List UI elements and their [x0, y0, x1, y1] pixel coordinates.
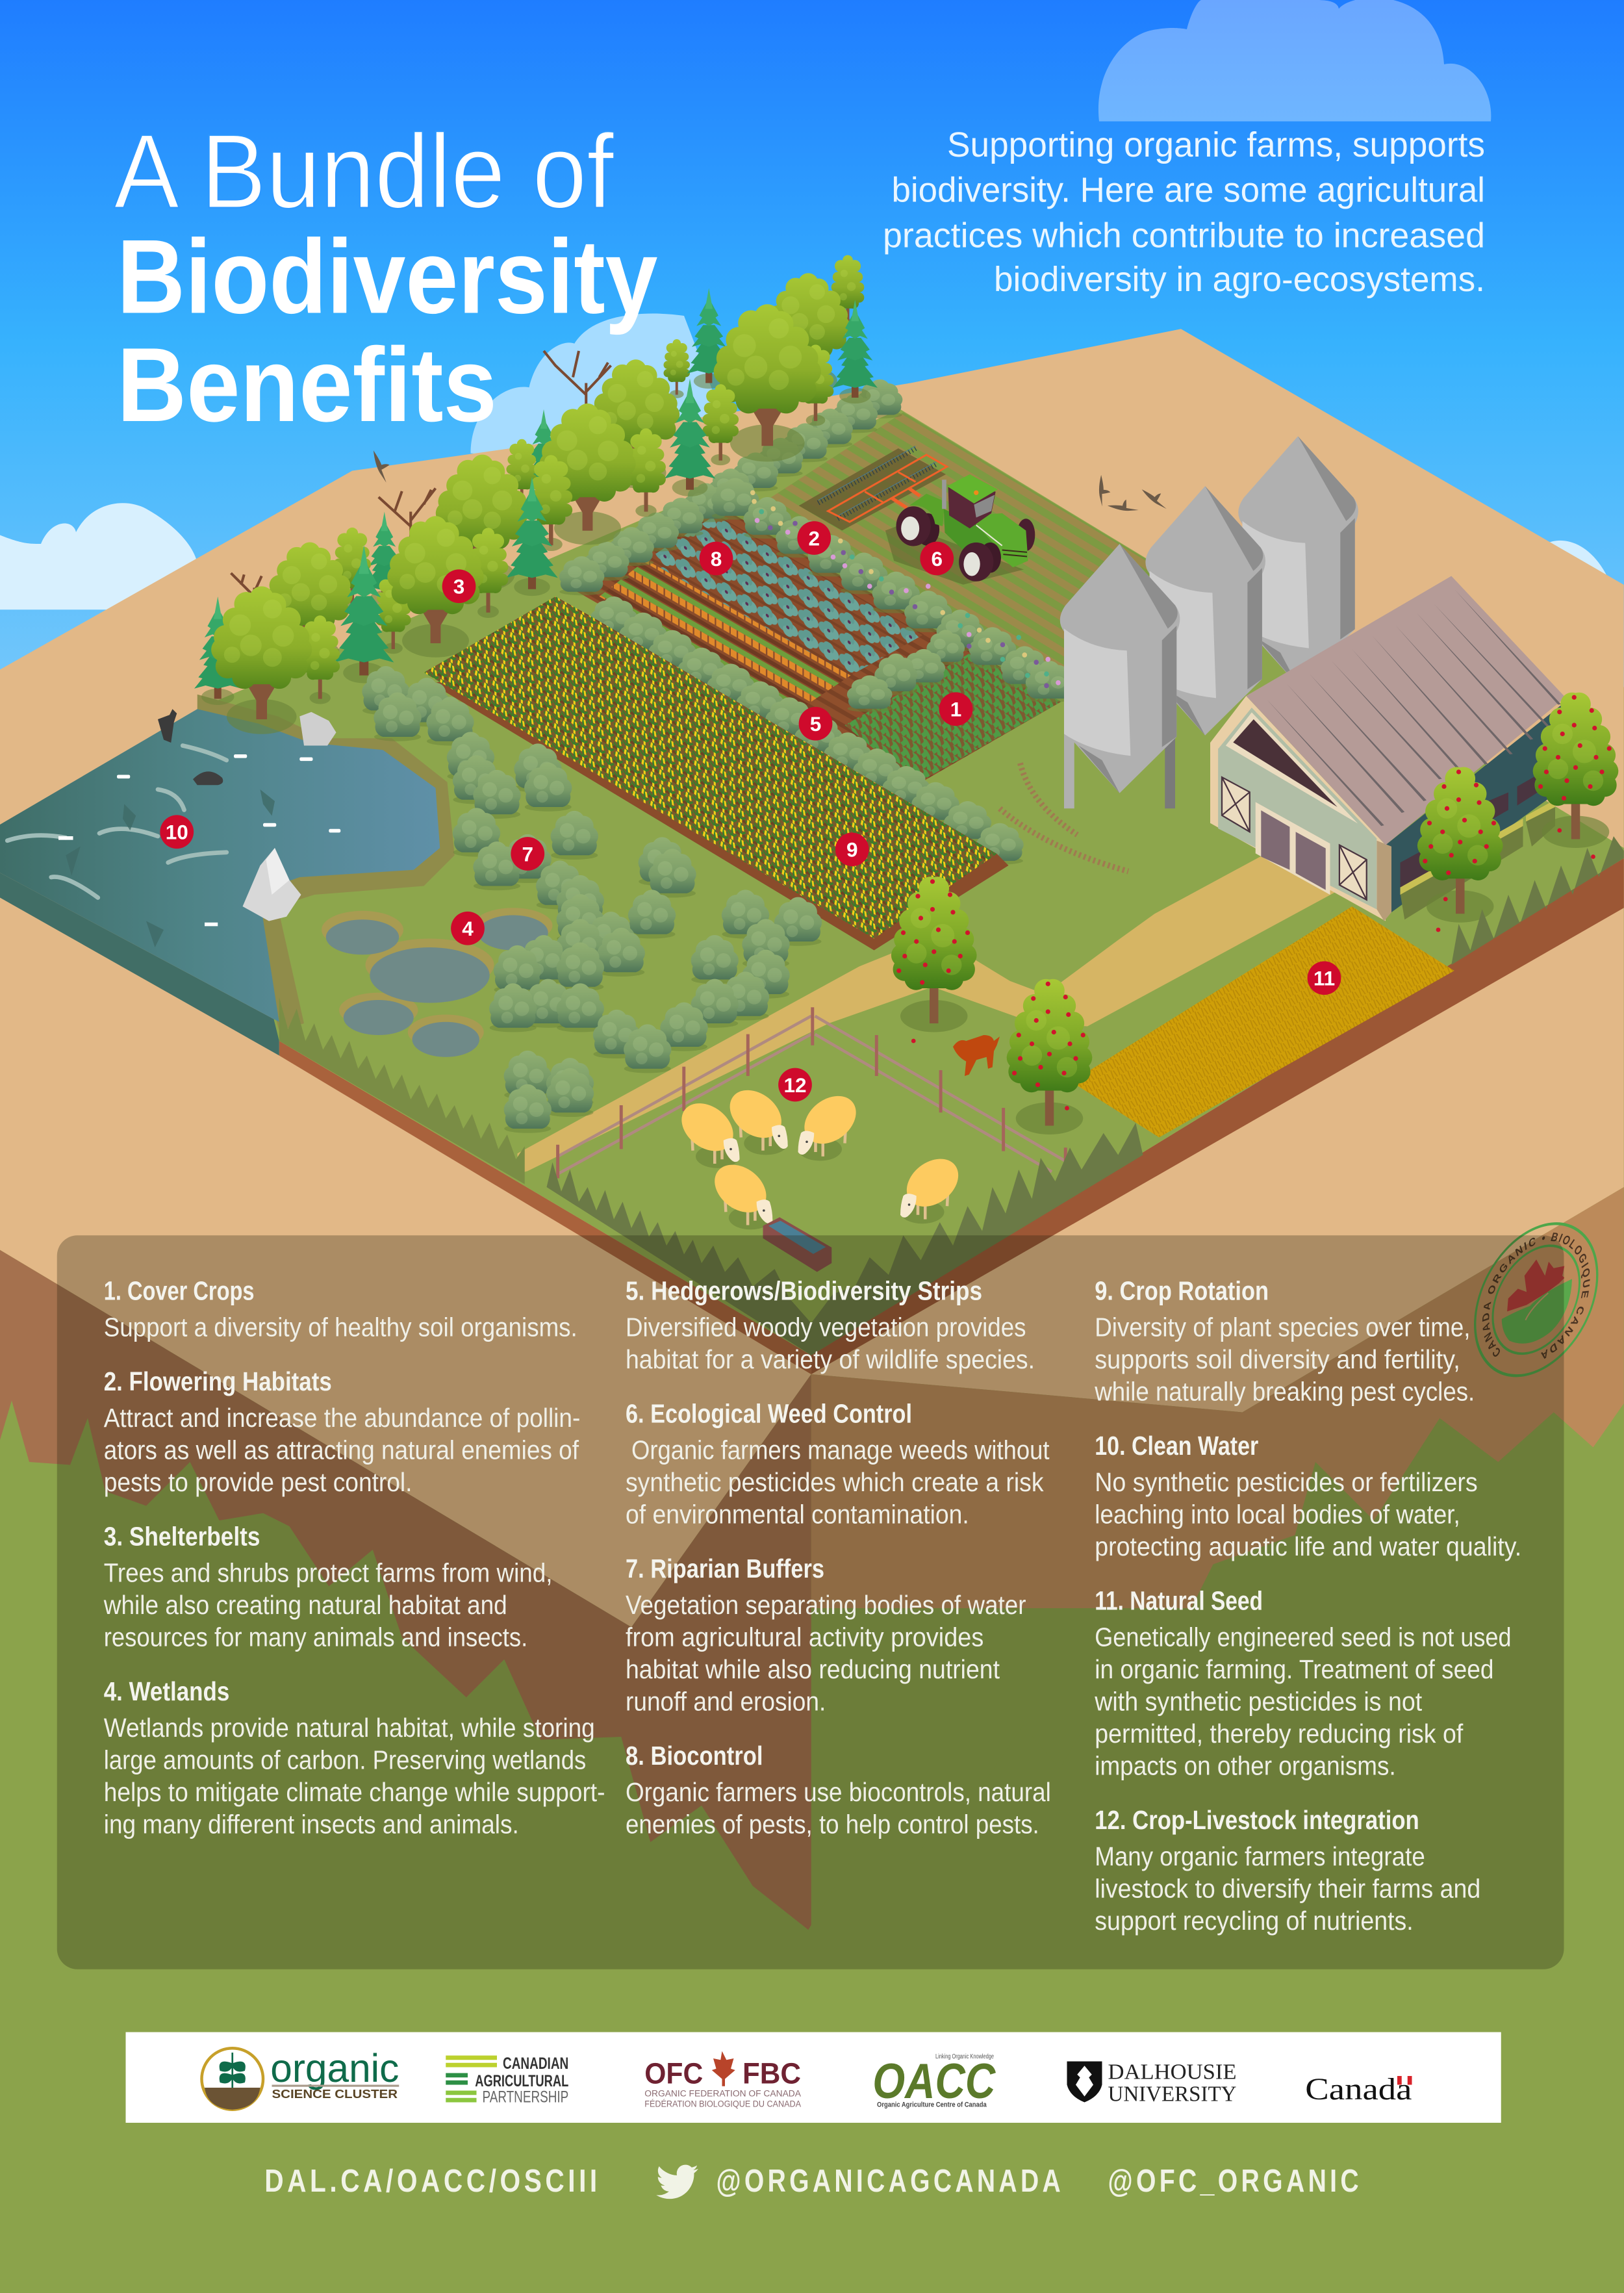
dirt path	[518, 855, 1336, 1174]
logo: Canadian Agricultural Partnership: PARTNERSHIP	[483, 2089, 568, 2107]
footer website: DAL.CA/OACC/OSCIII	[264, 2163, 601, 2199]
birds	[374, 450, 1169, 520]
column 1 practices: helps to mitigate climate change while support-	[104, 1777, 605, 1807]
farm block soil edges	[279, 858, 1624, 1374]
logo: OFC FBC: FÉDÉRATION BIOLOGIQUE DU CANADA	[644, 2099, 801, 2108]
number badges: 7	[522, 842, 533, 865]
footer handle: organicagcanada: @ORGANICAGCANADA	[717, 2163, 1064, 2199]
number badges: 8	[711, 547, 722, 570]
number badges: 10	[166, 821, 188, 844]
title: A Bundle of	[114, 113, 615, 231]
column 1 practices: ing many different insects and animals.	[104, 1810, 519, 1839]
lower brown soil faces	[0, 1187, 1624, 1930]
logo: Dalhousie University: DALHOUSIE	[1108, 2060, 1237, 2084]
water ripples	[7, 746, 227, 898]
column 2 practices: Diversified woody vegetation provides	[626, 1313, 1026, 1342]
column 2 practices: enemies of pests, to help control pests.	[626, 1810, 1039, 1839]
column 3 practices: with synthetic pesticides is not	[1094, 1687, 1423, 1717]
number badges: 4	[462, 917, 474, 940]
column 2 practices	[626, 1275, 1051, 1839]
logo: Canada wordmark: Canada	[1305, 2073, 1412, 2107]
foreground grass	[0, 1401, 1624, 2293]
column 2 practices: runoff and erosion.	[626, 1687, 826, 1717]
logo: Canadian Agricultural Partnership	[446, 2055, 568, 2107]
logo: OACC: Organic Agriculture Centre of Canada	[877, 2101, 987, 2108]
bare trees	[231, 351, 611, 608]
column 2 practices: Vegetation separating bodies of water	[626, 1590, 1026, 1620]
column 3 practices: Genetically engineered seed is not used	[1095, 1622, 1512, 1652]
field: crop rotation corn (9)	[424, 596, 997, 939]
tractor and harrow (6)	[799, 446, 1035, 585]
field: cover crops (1)	[845, 652, 1061, 784]
column 3 practices: 12. Crop-Livestock integration	[1095, 1805, 1419, 1835]
column 2 practices: habitat while also reducing nutrient	[626, 1654, 1000, 1684]
intro paragraph: practices which contribute to increased	[883, 216, 1485, 255]
logo: Canadian Agricultural Partnership: AGRICULTURAL	[475, 2073, 568, 2090]
trees: shelterbelt (3)	[194, 255, 878, 734]
column 2 practices: habitat for a variety of wildlife species.	[626, 1344, 1035, 1374]
column 3 practices: protecting aquatic life and water quality.	[1095, 1531, 1521, 1561]
footer handle: ofc organic: @OFC_ORGANIC	[1108, 2163, 1362, 2199]
column 1 practices: 1. Cover Crops	[104, 1275, 255, 1305]
column 3 practices: leaching into local bodies of water,	[1095, 1500, 1460, 1530]
column 2 practices: 8. Biocontrol	[626, 1741, 763, 1771]
field: carrots	[600, 560, 851, 711]
column 1 practices: Trees and shrubs protect farms from wind,	[104, 1558, 553, 1588]
column 3 practices: 11. Natural Seed	[1095, 1585, 1263, 1615]
icon: twitter bird	[656, 2165, 698, 2199]
logo: Organic Science Cluster: organic	[270, 2046, 399, 2090]
column 3 practices: Diversity of plant species over time,	[1095, 1313, 1471, 1342]
logo: Canadian Agricultural Partnership: CANADIAN	[503, 2055, 568, 2073]
clouds	[0, 0, 1608, 609]
number badges: 6	[931, 547, 943, 570]
number badges: 11	[1313, 967, 1335, 990]
column 1 practices: ators as well as attracting natural enemies of	[104, 1435, 579, 1465]
number badges: 1	[950, 698, 961, 721]
translucent text panel	[57, 1235, 1564, 1969]
column 3 practices: while naturally breaking pest cycles.	[1094, 1377, 1475, 1407]
hedgerow: biodiversity strip (5)	[590, 596, 1024, 865]
lake and shoreline	[0, 695, 455, 1031]
title: Biodiversity	[117, 218, 658, 336]
hedgerow: flowering habitat (2)	[711, 478, 1073, 702]
column 3 practices: support recycling of nutrients.	[1095, 1906, 1414, 1936]
wetland ponds	[322, 908, 553, 1057]
hedgerow: shelterbelt edge	[559, 379, 902, 595]
riparian buffer bushes (7)	[362, 666, 822, 1133]
logo: Dalhousie University: UNIVERSITY	[1108, 2082, 1237, 2106]
column 3 practices: 10. Clean Water	[1095, 1431, 1258, 1461]
water block side	[0, 873, 279, 1056]
tan ground	[0, 329, 1624, 1627]
intro paragraph	[883, 125, 1485, 299]
number badges: 2	[808, 526, 820, 550]
grass tufts along edges	[279, 836, 1624, 1355]
water highlights	[58, 754, 340, 926]
sheep flock (12)	[672, 1081, 967, 1229]
title: Benefits	[117, 326, 497, 444]
column 2 practices: synthetic pesticides which create a risk	[626, 1467, 1044, 1497]
animal: dog	[953, 1035, 1000, 1076]
column 2 practices: from agricultural activity provides	[626, 1622, 983, 1652]
column 2 practices: 5. Hedgerows/Biodiversity Strips	[626, 1275, 982, 1305]
intro paragraph: biodiversity in agro-ecosystems.	[994, 260, 1485, 299]
column 3 practices: in organic farming. Treatment of seed	[1095, 1654, 1494, 1684]
logo: OFC FBC: FBC	[742, 2056, 801, 2090]
intro paragraph: biodiversity. Here are some agricultural	[892, 171, 1485, 210]
column 2 practices: 7. Riparian Buffers	[626, 1554, 824, 1583]
column 1 practices: Attract and increase the abundance of pollin-	[104, 1403, 580, 1433]
column 1 practices: 3. Shelterbelts	[104, 1521, 260, 1551]
field: biocontrol cabbage (8)	[646, 515, 924, 676]
column 1 practices: resources for many animals and insects.	[104, 1622, 527, 1652]
logo bar	[126, 2032, 1501, 2123]
column 3 practices: impacts on other organisms.	[1095, 1751, 1396, 1781]
column 3 practices: livestock to diversify their farms and	[1095, 1874, 1480, 1904]
number badges: 9	[846, 838, 858, 862]
pond birds and rocks	[158, 709, 336, 921]
column 1 practices: 2. Flowering Habitats	[104, 1366, 332, 1396]
field: natural seed wheat (11)	[1071, 906, 1454, 1138]
water trough	[763, 1217, 831, 1272]
column 1 practices: Wetlands provide natural habitat, while storing	[104, 1713, 595, 1743]
intro paragraph: Supporting organic farms, supports	[947, 125, 1485, 164]
logo: Dalhousie University	[1067, 2060, 1237, 2106]
sky background	[0, 0, 1624, 687]
column 2 practices: Organic farmers use biocontrols, natural	[626, 1777, 1051, 1807]
column 3 practices: Many organic farmers integrate	[1095, 1841, 1425, 1871]
number badges: 5	[810, 712, 821, 736]
field: tractor strip (6)	[760, 413, 1169, 687]
soil bed of vegetable field	[570, 504, 1061, 785]
column 3 practices: No synthetic pesticides or fertilizers	[1095, 1467, 1478, 1497]
column 2 practices: 6. Ecological Weed Control	[626, 1398, 912, 1428]
grain silos	[1060, 436, 1358, 808]
number badges: 12	[783, 1073, 807, 1097]
fruit trees	[891, 693, 1618, 1134]
column 2 practices: of environmental contamination.	[626, 1500, 969, 1530]
fence	[558, 1007, 1065, 1179]
title	[114, 113, 658, 444]
column 3 practices	[1094, 1275, 1521, 1936]
number badges: 3	[453, 575, 464, 598]
column 1 practices: pests to provide pest control.	[104, 1467, 412, 1497]
logo: OFC FBC	[644, 2051, 801, 2108]
barn	[1210, 576, 1566, 921]
tire tracks	[1000, 763, 1128, 871]
logo: OACC: Linking Organic Knowledge	[935, 2053, 994, 2060]
column 1 practices	[103, 1275, 605, 1839]
logo: Organic Science Cluster: SCIENCE CLUSTER	[272, 2088, 398, 2101]
column 1 practices: while also creating natural habitat and	[103, 1590, 507, 1620]
column 1 practices: 4. Wetlands	[104, 1676, 229, 1706]
column 3 practices: 9. Crop Rotation	[1095, 1275, 1269, 1305]
Canada Organic stamp: CANADA ORGANIC • BIOLOGIQUE CANADA	[1482, 1233, 1590, 1359]
logo: OACC: OACC	[872, 2054, 996, 2109]
column 3 practices: permitted, thereby reducing risk of	[1095, 1719, 1464, 1749]
soil under corn field	[433, 623, 1009, 951]
column 3 practices: supports soil diversity and fertility,	[1095, 1344, 1460, 1374]
logo: Organic Science Cluster	[202, 2046, 399, 2110]
farm block top surface	[197, 409, 1624, 1355]
column 2 practices: Organic farmers manage weeds without	[631, 1435, 1050, 1465]
column 1 practices: large amounts of carbon. Preserving wetlands	[104, 1745, 586, 1775]
number badges	[160, 521, 1341, 1101]
column 1 practices: Support a diversity of healthy soil organisms.	[104, 1313, 577, 1342]
logo: OFC FBC: OFC	[644, 2056, 703, 2090]
logo: OFC FBC: ORGANIC FEDERATION OF CANADA	[644, 2089, 801, 2099]
fish shadows	[66, 789, 275, 947]
